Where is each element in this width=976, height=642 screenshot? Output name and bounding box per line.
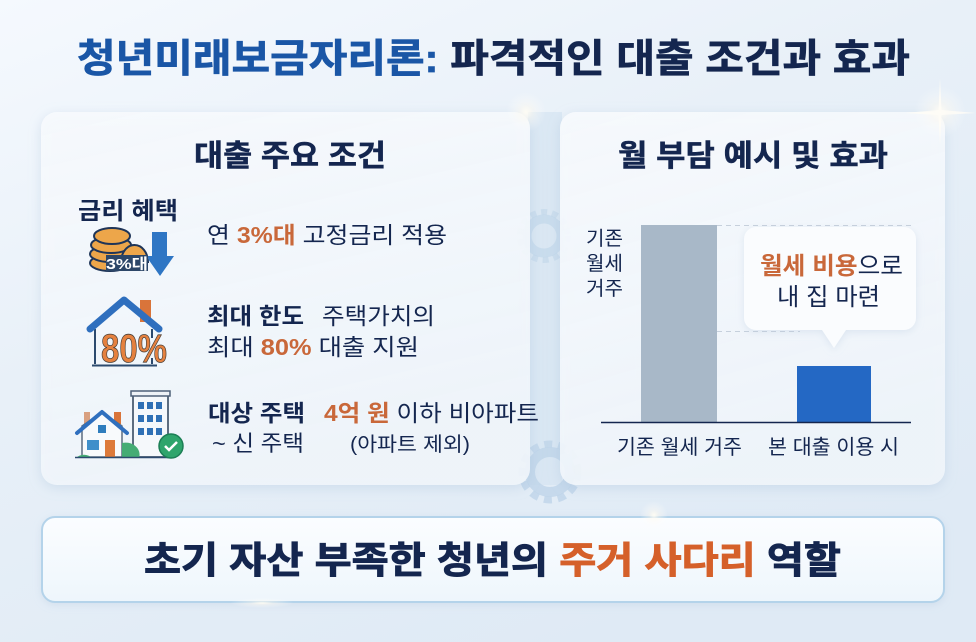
text: maximum limit: 최대 한도 [207,303,304,329]
text: maximum limit [207,303,435,360]
text: target housing: 대상 주택 [208,400,305,426]
icon: house 80% [90,300,167,371]
bar chart [586,225,912,459]
label: interest benefit: 금리 혜택 [78,198,178,225]
panel: monthly burden [560,112,945,485]
banner: summary [42,517,944,602]
text: target housing [208,400,539,456]
text: target housing: 4억 원 이하 비아파트 [324,400,539,426]
y label [586,228,623,300]
row: interest rate [78,198,447,276]
y label: 기존 [586,228,623,250]
heading: monthly burden: 월 부담 예시 및 효과 [618,140,888,173]
title: 청년미래보금자리론: 파격적인 대출 조건과 효과 [77,38,910,81]
row: target housing [75,391,539,458]
icon: coins and down arrow: 3%대 [106,256,148,273]
text: target housing: ~ 신 주택 [212,431,304,456]
bar: with this loan [797,366,871,422]
row: maximum limit [90,300,435,371]
panel: loan conditions [41,112,539,485]
text: interest rate: 연 3%대 고정금리 적용 [207,222,447,248]
x label: existing: 기존 월세 거주 [617,436,742,459]
callout: 월세 비용으로 [760,253,903,280]
y label: 거주 [586,278,623,300]
callout: 내 집 마련 [777,284,880,311]
bar: existing rent [641,225,717,422]
banner: summary: 초기 자산 부족한 청년의 주거 사다리 역할 [144,540,841,581]
x label: loan: 본 대출 이용 시 [768,436,899,459]
callout [744,227,916,348]
y label: 월세 [586,253,623,275]
icon: house and apartment with check [75,391,183,458]
heading: loan conditions: 대출 주요 조건 [194,140,386,173]
icon: coins and down arrow [90,228,174,276]
icon: house 80%: 80% [101,327,167,371]
text: maximum limit: 주택가치의 [322,303,435,329]
text: maximum limit: 최대 80% 대출 지원 [207,334,419,360]
text: target housing: (아파트 제외) [350,433,470,456]
